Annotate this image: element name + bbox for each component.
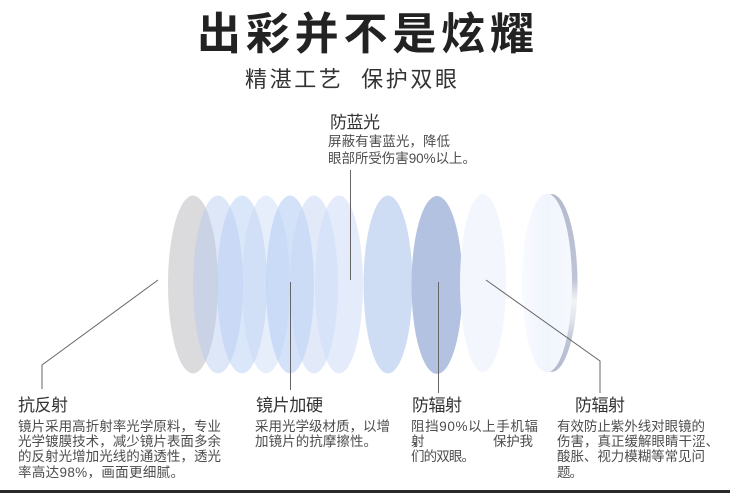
text block: lens hardening: 采用光学级材质，以增 [255,419,390,434]
text block: radiation protection: 们的双眼。 [411,449,475,464]
text block: blue light protection: 屏蔽有害蓝光，降低 [328,134,450,149]
lens: blue layer 5 [290,196,338,374]
text block: UV protection: 防辐射 [575,396,625,415]
text block: radiation protection: 射， [411,434,425,449]
title: 出彩并不是炫耀 [197,10,534,59]
lens: pale layer [460,194,506,372]
text block: anti-reflective [18,396,222,480]
lens: blue layer 2 [217,196,267,374]
text block: lens hardening: 镜片加硬 [256,396,323,415]
text block: anti-reflective: 镜片采用高折射率光学原料，专业 [18,418,221,434]
text block: UV protection: 酸胀、视力模糊等常见问 [557,448,705,464]
text block: anti-reflective: 光学镀膜技术，减少镜片表面多余 [18,433,222,449]
leader line: radiation [438,282,440,393]
text block: UV protection: 伤害，真正缓解眼睛干涩、 [557,434,719,449]
lens: blue layer 4 [266,196,314,374]
leader line: blue light [350,170,352,280]
lens: blue layer 1 [193,196,243,374]
leader line: hardening [290,282,292,390]
text block: blue light protection: 防蓝光 [330,113,380,132]
leader line: anti-reflective [42,280,158,389]
text block: blue light protection: 眼部所受伤害90%以上。 [328,151,476,166]
text block: lens hardening [255,396,390,449]
text block: anti-reflective: 率高达98%，画面更细腻。 [18,464,184,480]
lens: blue layer 3 [242,196,290,374]
text block: radiation protection: 防辐射 [412,396,462,415]
leader line: UV radiation [486,280,600,393]
bottom bar [0,490,730,493]
lens stack [168,194,578,374]
text block: radiation protection: 保护我 [493,434,534,449]
text block: lens hardening: 加镜片的抗摩擦性。 [255,433,377,449]
text block: UV protection: 有效防止紫外线对眼镜的 [557,419,705,434]
lens: finished lens with rim [522,194,578,372]
lens: anti-reflective grey layer [168,196,218,374]
text block: radiation protection: 阻挡90%以上手机辐 [411,419,538,434]
subtitle: 精湛工艺 保护双眼 [245,67,457,92]
text block: anti-reflective: 的反射光增加光线的通透性，透光 [18,449,221,464]
text block: anti-reflective: 抗反射 [18,396,68,415]
text block: UV protection [557,396,719,480]
lens: blue layer 7 [364,196,412,374]
text block: UV protection: 题。 [557,465,583,480]
text block: radiation protection [411,396,538,464]
text block: blue light protection [328,113,476,166]
lens: dark blue layer [412,196,462,374]
lens: blue layer 6 [315,196,363,374]
